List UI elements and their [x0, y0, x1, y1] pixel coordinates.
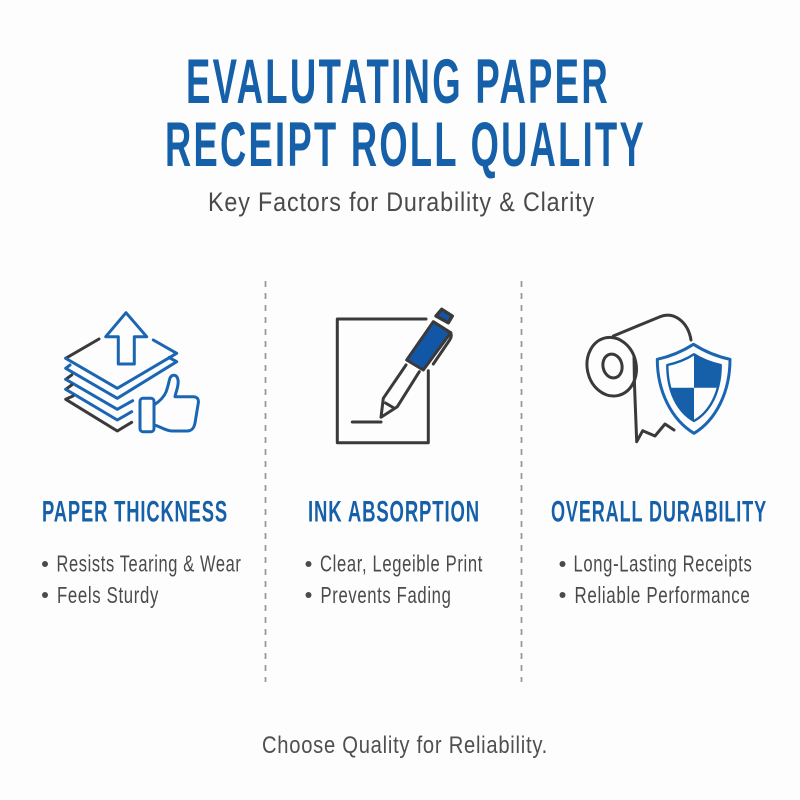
bullet list: paper thickness	[42, 550, 242, 608]
footer tagline: Choose Quality for Reliability.	[262, 732, 548, 759]
panel: overall durability	[551, 315, 767, 608]
subtitle: Key Factors for Durability & Clarity	[208, 187, 595, 217]
bullet list: ink absorption: Prevents Fading	[320, 582, 452, 608]
bullet list: ink absorption: Clear, Legeible Print	[320, 550, 483, 576]
bullet list: paper thickness: Feels Sturdy	[57, 582, 159, 608]
icon: paper roll with shield	[582, 315, 730, 442]
icon: pen on document	[337, 309, 452, 443]
panel: paper thickness	[42, 313, 242, 608]
heading: ink absorption: INK ABSORPTION	[308, 496, 480, 528]
title	[165, 47, 646, 180]
bullet list: ink absorption	[306, 550, 483, 608]
icon: paper stack with arrow and thumbs up	[66, 313, 198, 432]
bullet list: overall durability	[560, 550, 752, 608]
panel: ink absorption	[306, 309, 483, 608]
heading: paper thickness: PAPER THICKNESS	[42, 496, 228, 528]
bullet list: paper thickness: Resists Tearing & Wear	[56, 550, 242, 576]
